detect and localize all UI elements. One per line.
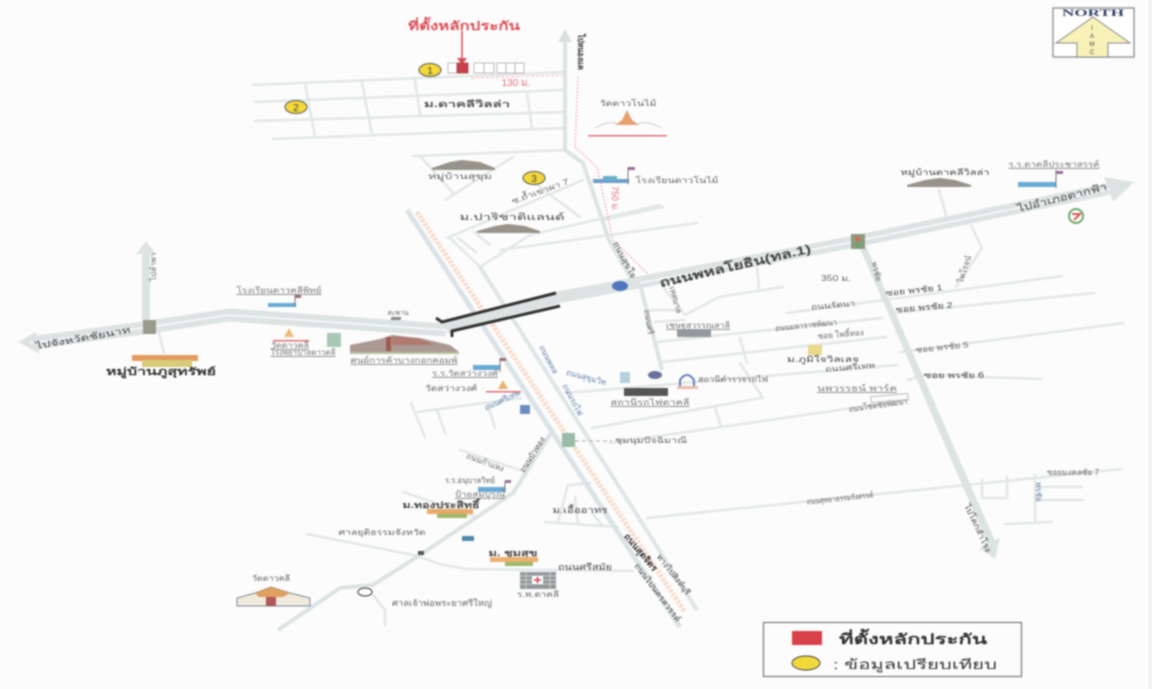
temple: Dao Khli large: วัดดาวคลี (252, 574, 290, 583)
blue square marker (520, 405, 530, 414)
label: shrine: ศาลเจ้าพ่อพระยาศรีใหญ่ (392, 598, 492, 608)
temple: Dao Khli (270, 328, 336, 357)
road label: Bua Thong: ถนนกำแหง (465, 452, 505, 474)
label: provincial court: ศาลยุติธรรมจังหวัด (338, 528, 426, 537)
road label: Bua Thong (465, 435, 547, 474)
small overpass label (387, 310, 409, 320)
highway labels: ถนนพหลโยธิน(ทล.1) (658, 241, 812, 290)
red arrow to site (457, 31, 467, 65)
east side road labels: ซอย โพธิ์ทอง (817, 326, 864, 341)
roundabout (358, 588, 372, 596)
soi label 7: ซ.ถ้ำเขาผา 7 (510, 175, 571, 206)
blue road labels along railway: ถนนพหล (537, 344, 560, 376)
east side road labels: ถนนรัตนา (811, 299, 855, 312)
north arrow: I (1091, 26, 1093, 32)
highway labels: ไปจังหวัดชัยนาท (33, 325, 131, 352)
rail-side rotated labels: ทางไปสิงห์บุรี (655, 552, 693, 597)
side road labels near station (611, 240, 683, 336)
temple: Sawang (425, 380, 521, 393)
highway: Phahonyothin road (18, 177, 1134, 354)
legend swatch: comparison (792, 656, 820, 670)
north arrow: NORTH (1062, 8, 1124, 18)
village icon: Sukhum: หมู่บ้านสุขุม (428, 172, 492, 182)
east side road labels: พรชัย (870, 261, 883, 282)
railway and parallel roads (407, 210, 697, 627)
blue road labels along railway (483, 344, 607, 417)
label: Dao Khli Villa: ม.ดาคลีวิลล่า (424, 99, 510, 109)
north arrow: A (1090, 34, 1094, 40)
east side road labels: ถนนโชคชัยพัฒนา (848, 396, 908, 414)
land plots row (448, 63, 524, 73)
temple: Dao Nonmai: วัดดาวโนไม้ (600, 98, 656, 108)
village logo: Thong Prasit: ม.ทองประสิทธิ์ (402, 498, 482, 510)
shopping centre building (350, 335, 459, 366)
village logo: Chumsuk: ม. ชุมสุข (488, 548, 538, 559)
village icon: Phumjai Village: ม.ภูมิใจวิลเลจ (787, 355, 859, 365)
distance: 750 m dotted route (575, 77, 647, 273)
distance: 750 m dotted route: 750 ม. (610, 186, 620, 212)
housing estate label and lot (817, 383, 908, 403)
comparison marker 1 (419, 64, 441, 77)
school icon: east: ร.ร.ดาคลีประชาสรรค์ (1008, 159, 1100, 169)
label: provincial court (338, 528, 426, 555)
village roads: Dao Khli Villa (159, 72, 1124, 625)
school icon: east (1008, 159, 1100, 188)
hospital icon (517, 572, 559, 599)
hospital icon: ร.พ.ดาคลี (517, 590, 559, 599)
east side road labels: ไปโคกสำโรง (962, 501, 994, 554)
medium roads (278, 288, 662, 630)
village logo: Thong Prasit (402, 498, 482, 518)
side road labels near station: ถนนศรี (642, 309, 655, 336)
highway shield (612, 281, 628, 291)
east side road labels: ซอย พรชัย 2 (895, 300, 954, 314)
village icon: Phumjai Village (787, 345, 859, 365)
building: Chet Suwan school: เชษฐสุวรรณสาลี (666, 321, 730, 330)
distance: 130 m (471, 75, 563, 89)
rail-side rotated labels: ถนนไปนครสวรรค์ (632, 561, 683, 624)
legend text: comparison: : ข้อมูลเปรียบเทียบ (833, 657, 997, 673)
side road labels near station: ถนนสุขใจ (611, 240, 638, 280)
station plaza marker (562, 433, 688, 447)
school icon: south: ป้ายสมบูรณ์ (455, 489, 506, 500)
road: south branch to Khok Samrong with arrow (860, 246, 1000, 559)
road label: to Nong Khae: ไปหนองแค (576, 33, 587, 70)
road label: Bua Thong: ถนนบัวทอง (518, 435, 547, 474)
school icon: west (236, 285, 322, 307)
temple: Dao Khli: วัดดาวคลี (271, 341, 309, 350)
north arrow: C (1090, 50, 1095, 56)
road: west vertical with arrow (136, 241, 156, 322)
north arrow: M (1090, 42, 1094, 48)
building: Chet Suwan school (666, 321, 730, 337)
vertical west road label: ไปลำพา (149, 253, 158, 282)
east side road labels: ซอย พรชัย 5 (915, 340, 970, 355)
label: south village: ม.เอื้ออาทร (552, 504, 608, 515)
village icon: Parichat Land: ม.ปาริชาติแลนด์ (460, 211, 565, 222)
village logo: Phu Sap (106, 355, 216, 379)
train station group: สถานีรถไฟดาคลี (610, 398, 690, 407)
east side road labels: 350 ม. (821, 274, 851, 283)
east side road labels (775, 254, 1100, 554)
east side road labels: ถนนมหาราชพัฒนา (775, 318, 837, 333)
green marker (327, 333, 341, 347)
train station group: สถานีตำรวจรถไฟ (698, 375, 768, 384)
legend swatch: collateral (792, 631, 822, 645)
east side road labels: ถนนศรีเทพ (825, 361, 875, 374)
distance: 130 m: 130 ม. (502, 78, 530, 89)
road label: Si Samai: ถนนศรีสมัย (558, 562, 612, 572)
overpass (436, 293, 560, 337)
temple: Dao Khli large (237, 574, 310, 606)
gas station logo (1069, 209, 1083, 223)
village logo: Phu Sap: หมู่บ้านภูสุทรัพย์ (106, 366, 216, 379)
station plaza marker: ชุมนุมปัจฉิมาณี (615, 436, 688, 445)
temple: Sawang: วัดสว่างวงศ์ (425, 383, 477, 393)
village icon: Dao Khli Villa east (900, 168, 990, 187)
village icon: Sukhum (428, 160, 495, 182)
east side road labels: ไพโรจน์ (955, 254, 973, 285)
shopping centre building: ศูนย์การค้าบางกอกคอมพ์ (350, 355, 458, 366)
school icon: west: โรงเรียนดาวคลีพิทย์ (236, 285, 322, 295)
traffic signal: west (143, 320, 156, 334)
school icon: south: ร.ร.อนุบาลวิทย์ (445, 475, 495, 485)
title: collateral location: ที่ตั้งหลักประกัน (408, 16, 521, 33)
blue road labels along railway: ถนนสุขุมวิท (565, 368, 607, 387)
comparison marker 2: 2 (293, 103, 299, 114)
comparison marker 3 (523, 172, 545, 185)
school icon: Dao Nonmai school (593, 167, 718, 185)
small overpass label: สะพาน (387, 310, 409, 317)
comparison marker 2 (285, 100, 307, 114)
bank marker (462, 536, 474, 541)
minor road network (159, 72, 1124, 630)
east side road labels: พรชัย (1034, 482, 1043, 502)
road: north road to Nong Khae with arrow (558, 29, 635, 285)
village logo: Chumsuk (488, 548, 538, 566)
school icon: Dao Nonmai school: โรงเรียนดาวโนไม้ (636, 175, 718, 185)
legend text: collateral: ที่ตั้งหลักประกัน (839, 628, 988, 647)
temple: Dao Khli: โรงพยาบาลดาวคลี (270, 347, 336, 357)
north arrow (1053, 8, 1134, 57)
highway labels (33, 181, 1108, 352)
rail-side rotated labels: ถนนสุดจิตร (621, 532, 659, 574)
comparison marker 3: 3 (531, 174, 537, 185)
east side road labels: ซอย พรชัย 6 (924, 371, 985, 380)
highway labels: ไปอำเภอตากฟ้า (1015, 181, 1108, 215)
east side road labels: ซอยมงคลชัย 7 (1047, 468, 1100, 477)
train station group (610, 371, 768, 407)
legend (764, 622, 1022, 676)
housing estate label and lot: นพวรรธน์ พาร์ค (817, 383, 897, 393)
east side road labels: ถนนสุทธาธรรมรังสรรค์ (806, 490, 874, 506)
village icon: Dao Khli Villa east: หมู่บ้านดาคลีวิลล่า (900, 168, 990, 178)
blue road labels along railway: ถนนรถไฟ (560, 382, 585, 417)
school icon: south (445, 475, 511, 500)
temple: Dao Nonmai (588, 98, 667, 136)
east side road labels: ซอย พรชัย 1 (885, 283, 944, 298)
traffic signal: east (851, 234, 865, 249)
comparison marker 1: 1 (427, 66, 433, 77)
village icon: Parichat Land (460, 211, 565, 233)
rail-side rotated labels (621, 532, 693, 624)
school icon: centre (432, 358, 506, 378)
side road labels near station: เทศบาล (668, 285, 683, 314)
blue road labels along railway: ถนนศรีเทพ (483, 388, 522, 413)
school icon: centre: ร.ร.วัดสว่างวงศ์ (432, 368, 498, 378)
